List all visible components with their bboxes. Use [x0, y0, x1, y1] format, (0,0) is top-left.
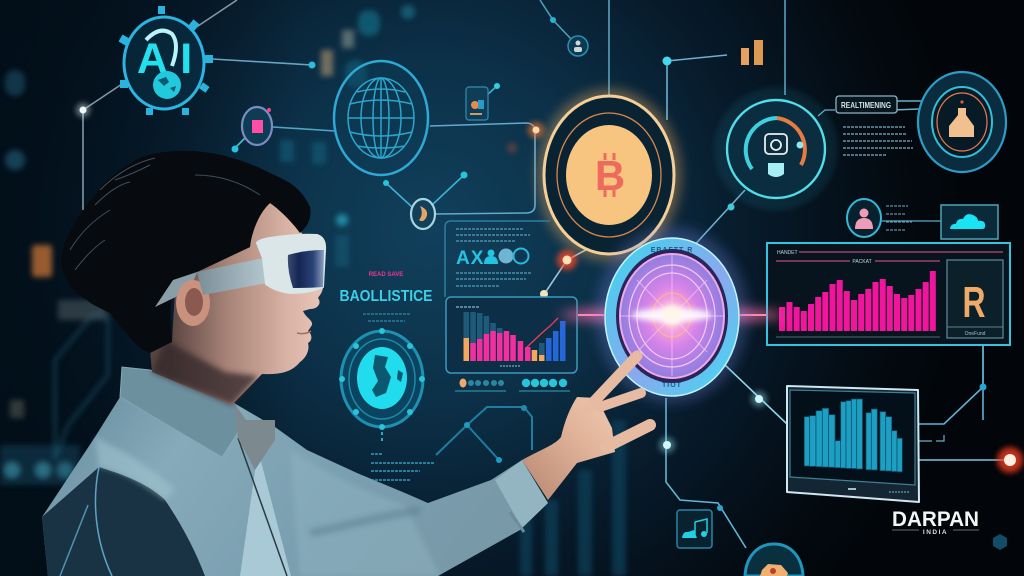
- icon: small user: [847, 199, 881, 237]
- brand: Darpan India logo: INDIA: [923, 529, 948, 536]
- icon: orange signal bars: [741, 40, 763, 65]
- text block: description: [843, 127, 913, 155]
- icon: music note: [677, 510, 712, 548]
- dashboard: pink bar chart: R: [962, 278, 986, 327]
- pink flare: [560, 227, 784, 403]
- icon: glowing target dial: TIOT: [662, 382, 682, 389]
- dashboard: pink bar chart: HANDET: [777, 250, 798, 256]
- person: hair: [61, 151, 311, 353]
- icon: hexagon: [993, 534, 1007, 550]
- icon: earth circle: [339, 328, 425, 430]
- connector nodes: [76, 17, 1023, 511]
- icon: pink cube badge: [242, 107, 272, 145]
- person: boy with VR headset: [42, 151, 650, 576]
- label: realtime pill: REALTIMENING: [841, 100, 891, 110]
- blurred lower column bars: [520, 420, 626, 576]
- person: VR headset: [197, 235, 325, 295]
- blurred background panels: [0, 5, 517, 485]
- brand: Darpan India logo: DARPAN: [892, 508, 979, 531]
- text block: AX panel: [445, 221, 550, 297]
- icon: bitcoin coin: B: [595, 152, 625, 199]
- person: shirt body: [42, 367, 548, 576]
- text block: lower caption: [371, 454, 434, 480]
- icon: camera hand circle: [714, 87, 838, 211]
- person: VR headset strap tip: [155, 272, 197, 307]
- icon: glowing target dial: [605, 238, 739, 396]
- bar and line chart panel: [446, 297, 577, 373]
- icon: AI badge: [119, 6, 213, 115]
- icon: person badge: [918, 72, 1006, 172]
- person: neck and face: [150, 203, 323, 405]
- icon: globe: [334, 61, 428, 175]
- text block: user caption: [886, 206, 912, 230]
- dashboard: pink bar chart: OneFund: [965, 331, 986, 337]
- icon: bottom badge: [745, 544, 803, 576]
- icon: small orange node: [411, 199, 435, 229]
- person: ear: [176, 280, 210, 326]
- heading: Baollistice: [340, 272, 432, 321]
- icon: cloud box: [941, 205, 998, 239]
- heading: Baollistice: BAOLLISTICE: [340, 288, 432, 305]
- person: hand: [522, 356, 650, 500]
- monitor: teal bar chart: [787, 386, 919, 502]
- label: realtime pill: [836, 96, 897, 113]
- icon: glowing target dial: EBAFTT R: [651, 247, 693, 254]
- dashboard: pink bar chart: [767, 243, 1010, 345]
- icon: document: [466, 87, 488, 120]
- icon: bitcoin coin: [537, 89, 681, 261]
- dashboard: pink bar chart: PACKAT: [852, 259, 872, 265]
- icon: small circle top: [568, 36, 588, 56]
- heading: Baollistice: READ SAVE: [369, 272, 403, 278]
- text block: AX panel: AX: [456, 248, 484, 269]
- icon: AI badge: A I: [137, 35, 193, 83]
- dot indicators: [455, 378, 570, 391]
